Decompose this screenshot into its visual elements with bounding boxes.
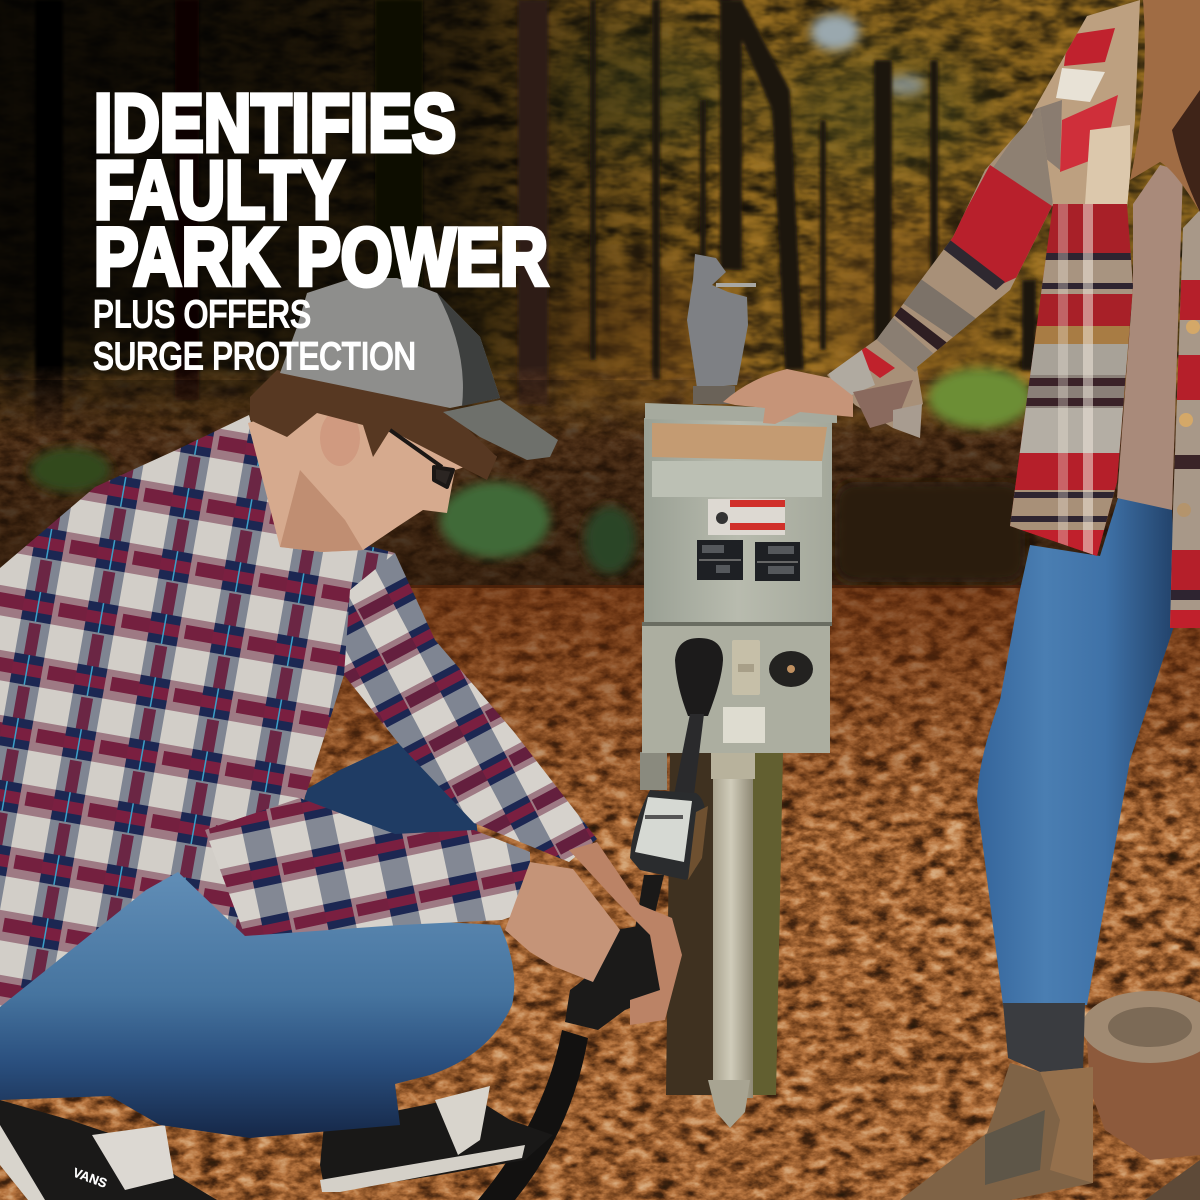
title: FAULTY (94, 145, 344, 236)
woman sock (1003, 1003, 1085, 1072)
broken gray stump behind box (687, 254, 756, 404)
title (94, 78, 548, 303)
woman shirt yoke (1027, 0, 1140, 207)
power pedestal box (642, 403, 837, 753)
woman sleeve (827, 110, 1053, 428)
sky gaps through trees (811, 14, 925, 95)
forest floor and leaf litter (0, 360, 1200, 1200)
title: IDENTIFIES (94, 78, 456, 169)
woman standing (723, 0, 1200, 1200)
man back leg jeans (300, 742, 480, 925)
surge protector device (630, 790, 708, 880)
utility cover (1082, 991, 1200, 1160)
man glasses (390, 430, 453, 487)
man crouching (0, 278, 682, 1200)
man shirt upper sleeve (344, 553, 597, 862)
surge protector plug and cable (478, 638, 723, 1200)
man ear (320, 410, 360, 466)
man neck and face (248, 400, 497, 552)
woman right shirt panel (1170, 210, 1200, 628)
woman cuff (853, 380, 913, 428)
man hands (505, 842, 682, 1025)
man shoes: VANS (71, 1165, 109, 1191)
man shirt lower sleeve (205, 798, 530, 936)
tree trunks (35, 0, 1036, 430)
title: PARK POWER (94, 212, 548, 303)
circuit breakers (697, 540, 800, 581)
woman hand on box (723, 369, 853, 424)
danger warning label (708, 499, 785, 535)
woman second boot (1145, 1160, 1200, 1200)
box lid (645, 403, 837, 423)
woman jeans (977, 498, 1176, 1005)
utility post and conduit (640, 752, 783, 1128)
left darkening overlay (0, 0, 1200, 436)
woman plaid shirt body (1010, 204, 1133, 556)
man hair (250, 370, 497, 480)
subtitle: SURGE PROTECTION (93, 336, 416, 378)
man shoes (0, 1086, 553, 1200)
woman hair (1130, 0, 1200, 212)
green bushes and dark hollow (30, 368, 1032, 582)
woman boot (900, 1063, 1093, 1200)
man cap (280, 278, 558, 460)
man thigh jeans (0, 866, 514, 1138)
woman undershirt (1117, 165, 1183, 510)
subtitle: PLUS OFFERS (93, 294, 311, 336)
man shirt torso (0, 415, 395, 1007)
subtitle (93, 294, 416, 378)
receptacles (732, 640, 813, 695)
forest background (0, 0, 1200, 620)
sticker (723, 707, 765, 743)
